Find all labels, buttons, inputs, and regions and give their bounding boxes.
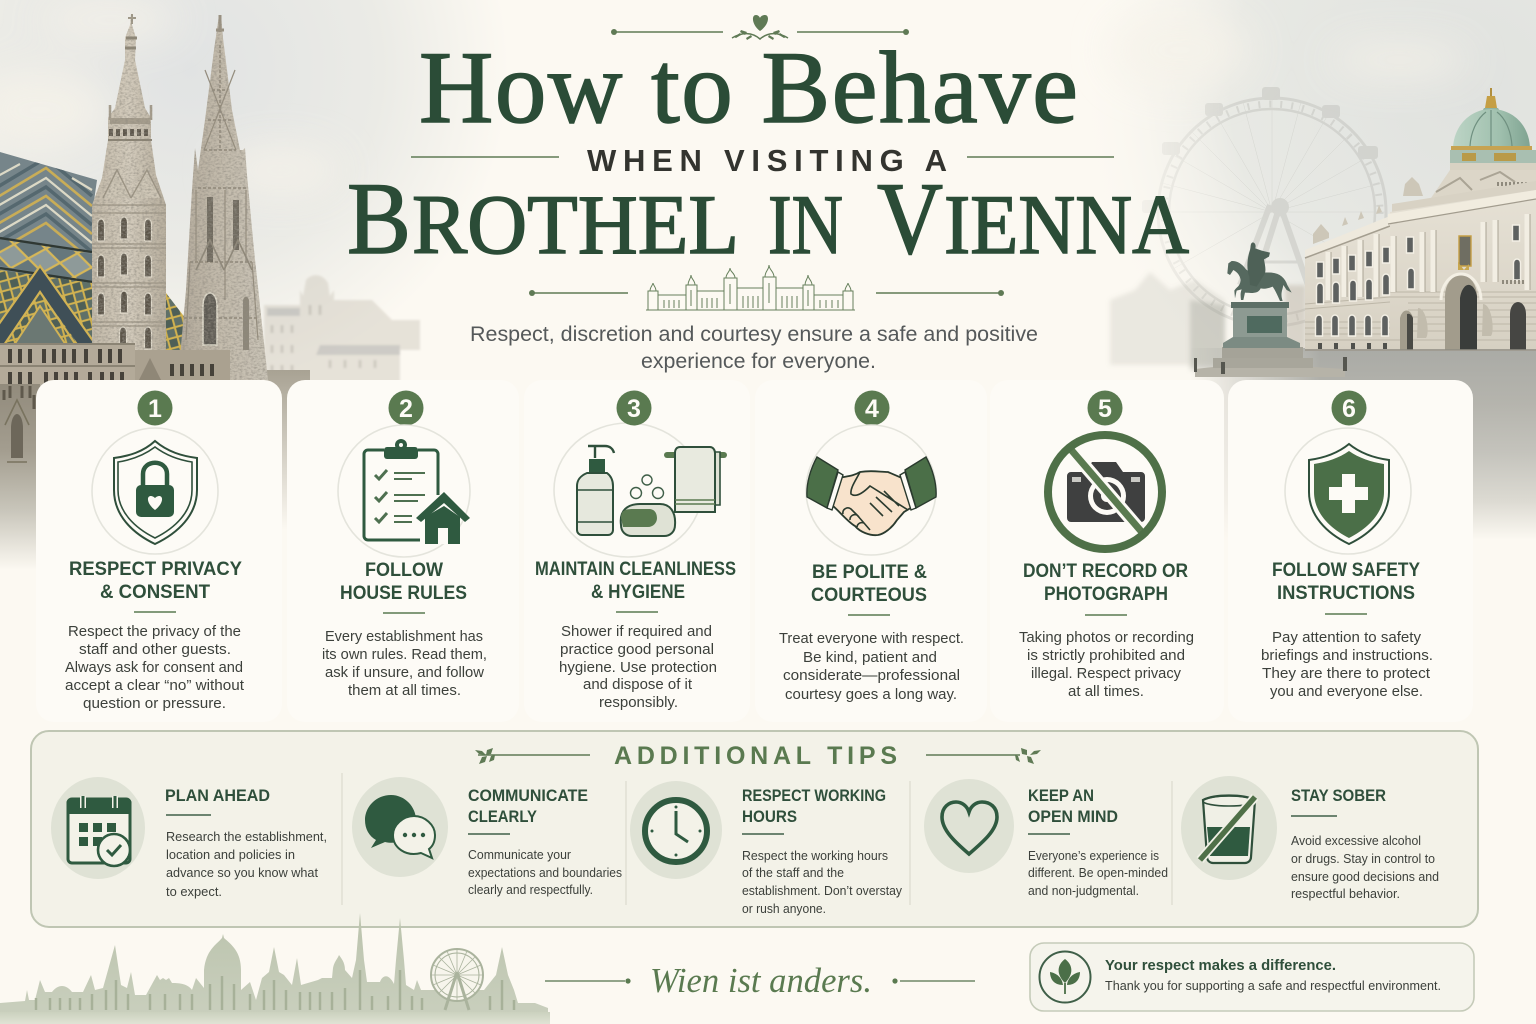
icon: crossed glass xyxy=(1181,776,1277,880)
lower cathedral fading into page xyxy=(0,345,40,570)
card background xyxy=(1228,380,1473,722)
icon: handshake xyxy=(806,425,936,555)
text xyxy=(1291,787,1439,901)
body text: Be kind, patient and xyxy=(803,650,937,666)
heading: PHOTOGRAPH xyxy=(1044,583,1168,605)
text: expectations and boundaries xyxy=(468,865,622,880)
tiled roof xyxy=(0,150,100,350)
body text: Respect the privacy of the xyxy=(68,624,241,640)
intro text: Respect, discretion and courtesy ensure a safe and positive xyxy=(470,323,1038,346)
number badge 4 xyxy=(854,390,890,426)
heading: MAINTAIN CLEANLINESS xyxy=(535,558,736,580)
card background xyxy=(990,380,1224,722)
body text: briefings and instructions. xyxy=(1261,648,1433,664)
text: to expect. xyxy=(166,884,222,899)
body text: staff and other guests. xyxy=(79,642,231,658)
text xyxy=(468,787,622,897)
heading xyxy=(1272,559,1420,604)
icon: calendar xyxy=(51,777,145,879)
text xyxy=(165,787,327,899)
body text xyxy=(559,624,717,711)
plaza ground xyxy=(1204,348,1536,530)
body text xyxy=(1261,630,1433,700)
panel: card 4 polite xyxy=(755,380,987,722)
icon: leaf xyxy=(1040,952,1090,1002)
body text: practice good personal xyxy=(560,642,714,658)
heading: & HYGIENE xyxy=(591,581,685,603)
number badge 1: 1 xyxy=(148,395,162,423)
number badge 6 xyxy=(1332,390,1366,426)
small ferris wheel xyxy=(431,949,483,1010)
background: sky right xyxy=(1040,0,1536,420)
heading: INSTRUCTIONS xyxy=(1277,582,1415,604)
ornament: top heart and leaves xyxy=(611,15,909,40)
chevrons xyxy=(0,162,93,254)
stone courses xyxy=(1305,292,1536,340)
heading: RESPECT PRIVACY xyxy=(69,558,242,580)
heading xyxy=(811,561,927,606)
intro text: experience for everyone. xyxy=(641,350,876,373)
heading xyxy=(69,558,242,603)
callout text: Your respect makes a difference. xyxy=(1105,957,1336,974)
text: establishment. Don’t overstay xyxy=(742,883,902,898)
number badge 5 xyxy=(1088,390,1122,426)
number badge 3: 3 xyxy=(627,395,641,423)
body text: Taking photos or recording xyxy=(1019,630,1194,646)
text xyxy=(742,787,902,916)
center block xyxy=(1390,190,1536,351)
body text: its own rules. Read them, xyxy=(322,647,487,663)
text: Avoid excessive alcohol xyxy=(1291,833,1421,848)
illustration: vienna skyline xyxy=(0,913,550,1024)
body text: illegal. Respect privacy xyxy=(1031,666,1182,682)
body text xyxy=(1019,630,1194,700)
card background xyxy=(755,380,987,722)
panel: card 3 cleanliness xyxy=(524,380,750,722)
horse and rider xyxy=(1227,242,1292,301)
tip: keep an open mind xyxy=(924,779,1168,898)
icon: soap, bottle and towel xyxy=(554,423,727,557)
body text: accept a clear “no” without xyxy=(65,678,244,694)
attic and sculptures xyxy=(1431,170,1536,198)
ground band xyxy=(0,1012,550,1024)
hazy buildings behind statue xyxy=(1110,272,1306,370)
body text: you and everyone else. xyxy=(1270,684,1423,700)
heading xyxy=(475,742,1041,770)
background: sky left xyxy=(0,0,520,420)
body text: hygiene. Use protection xyxy=(559,660,717,676)
heading: ADDITIONAL TIPS xyxy=(614,742,897,770)
illustration: Hofburg palace xyxy=(1305,88,1536,351)
tagline: Wien ist anders xyxy=(545,961,975,1000)
card background xyxy=(287,380,519,722)
title: brothel in vienna: IENNA xyxy=(944,178,1189,272)
right spire tower xyxy=(178,15,268,380)
icon: no camera xyxy=(1048,435,1162,549)
text: Research the establishment, xyxy=(166,829,327,844)
card background xyxy=(524,380,750,722)
heading xyxy=(1023,560,1188,605)
heading: FOLLOW SAFETY xyxy=(1272,559,1420,581)
monument base xyxy=(1194,302,1347,377)
text: HOURS xyxy=(742,808,797,826)
heading: & CONSENT xyxy=(100,581,210,603)
title: brothel in vienna: V xyxy=(877,162,943,276)
number badge 3 xyxy=(616,390,652,426)
callout box xyxy=(1030,943,1474,1011)
illustration: Riesenrad ferris wheel xyxy=(1142,87,1386,326)
icon: heart xyxy=(924,779,1014,873)
left spire tower xyxy=(92,14,166,386)
tip: stay sober xyxy=(1181,776,1439,901)
text: PLAN AHEAD xyxy=(165,787,270,805)
body text: courtesy goes a long way. xyxy=(785,687,957,703)
columns xyxy=(1328,214,1527,300)
title: brothel in vienna xyxy=(347,162,1189,276)
panel background xyxy=(31,731,1478,927)
dome xyxy=(1450,88,1536,180)
text: respectful behavior. xyxy=(1291,886,1400,901)
text: OPEN MIND xyxy=(1028,808,1118,826)
text: ensure good decisions and xyxy=(1291,869,1439,884)
icon: safety shield xyxy=(1285,428,1411,554)
body text: responsibly. xyxy=(599,695,678,711)
panel: card 6 safety xyxy=(1228,380,1473,722)
hazy city buildings xyxy=(264,275,420,382)
number badge 6: 6 xyxy=(1342,395,1356,423)
column separators xyxy=(342,773,1172,905)
number badge 4: 4 xyxy=(865,395,879,423)
background: clouds xyxy=(0,0,1470,194)
illustration: equestrian statue xyxy=(1194,242,1347,377)
text: different. Be open-minded xyxy=(1028,865,1168,880)
icon: shield with lock xyxy=(92,428,218,554)
body text: them at all times. xyxy=(348,683,461,699)
ornament: palace line drawing xyxy=(529,265,1004,310)
heading xyxy=(535,558,736,603)
body text: Always ask for consent and xyxy=(65,660,243,676)
intro text xyxy=(470,323,1038,373)
body text xyxy=(322,629,487,699)
text: of the staff and the xyxy=(742,865,844,880)
text: advance so you know what xyxy=(166,865,318,880)
left strip arches xyxy=(4,386,34,462)
panel: card 2 house rules xyxy=(287,380,519,722)
text xyxy=(1028,787,1168,898)
callout: your respect makes a difference xyxy=(1030,943,1474,1011)
text: STAY SOBER xyxy=(1291,787,1386,805)
body text: Shower if required and xyxy=(561,624,712,640)
body text xyxy=(779,631,964,703)
body text: question or pressure. xyxy=(83,696,226,712)
heading: DON’T RECORD OR xyxy=(1023,560,1188,582)
subtitle: when visiting a: WHEN VISITING A xyxy=(587,143,947,178)
tip: respect working hours xyxy=(630,781,902,916)
body text: They are there to protect xyxy=(1262,666,1430,682)
right roof section xyxy=(166,293,216,362)
tip: communicate clearly xyxy=(352,777,622,897)
skyline details xyxy=(36,970,514,1010)
panel: additional tips xyxy=(31,731,1478,927)
heading: COURTEOUS xyxy=(811,584,927,606)
heading: FOLLOW xyxy=(365,559,444,581)
body text: ask if unsure, and follow xyxy=(325,665,485,681)
text: Communicate your xyxy=(468,847,572,862)
number badge 5: 5 xyxy=(1098,395,1112,423)
title: how to behave: How to Behave xyxy=(419,31,1078,145)
number badge 2: 2 xyxy=(399,395,413,423)
windows xyxy=(1316,225,1520,349)
text: or drugs. Stay in control to xyxy=(1291,851,1435,866)
text: COMMUNICATE xyxy=(468,787,588,805)
body text: and dispose of it xyxy=(583,677,692,693)
archways xyxy=(1445,275,1477,350)
balustrade xyxy=(0,343,230,384)
body text: Pay attention to safety xyxy=(1272,630,1422,646)
text: CLEARLY xyxy=(468,808,537,826)
panel: card 1 respect privacy xyxy=(36,380,282,722)
text: Respect the working hours xyxy=(742,848,888,863)
text: and non-judgmental. xyxy=(1028,883,1139,898)
title: brothel in vienna: IN xyxy=(768,178,843,272)
title: brothel in vienna: B xyxy=(347,162,411,276)
body text: is strictly prohibited and xyxy=(1027,648,1185,664)
icon: speech bubbles xyxy=(352,777,448,877)
icon: clock xyxy=(630,781,722,879)
body text xyxy=(65,624,244,712)
tip: plan ahead xyxy=(51,777,327,899)
body text: Every establishment has xyxy=(325,629,483,645)
text: location and policies in xyxy=(166,847,295,862)
number badge 2 xyxy=(388,390,424,426)
text: clearly and respectfully. xyxy=(468,882,593,897)
heading: BE POLITE & xyxy=(812,561,927,583)
number badge 1 xyxy=(138,390,172,426)
heading xyxy=(340,559,467,604)
title: brothel in vienna: ROTHEL xyxy=(412,178,739,272)
icon: clipboard and house xyxy=(338,425,470,557)
text: Everyone’s experience is xyxy=(1028,848,1159,863)
heading: HOUSE RULES xyxy=(340,582,467,604)
tagline: Wien ist anders: Wien ist anders. xyxy=(650,961,872,1000)
body text: Treat everyone with respect. xyxy=(779,631,964,647)
left wing xyxy=(1305,218,1390,351)
text: RESPECT WORKING xyxy=(742,787,886,805)
callout text xyxy=(1105,957,1441,993)
body text: at all times. xyxy=(1068,684,1144,700)
text: KEEP AN xyxy=(1028,787,1094,805)
callout text: Thank you for supporting a safe and respectful environment. xyxy=(1105,978,1441,993)
body text: considerate—professional xyxy=(783,668,960,684)
card background xyxy=(36,380,282,722)
panel: card 5 no recording xyxy=(990,380,1224,722)
illustration: St. Stephen's Cathedral xyxy=(0,14,420,570)
text: or rush anyone. xyxy=(742,901,826,916)
